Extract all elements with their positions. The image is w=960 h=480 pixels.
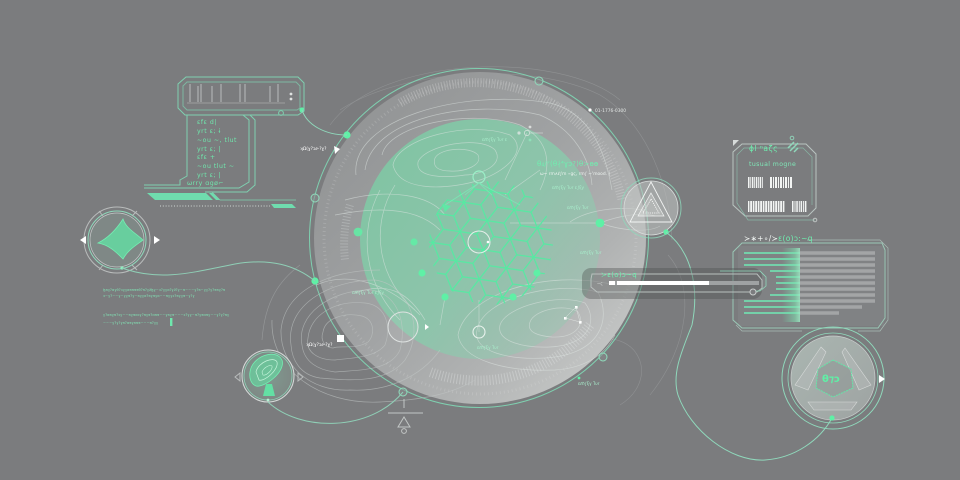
globe centre ring xyxy=(468,231,490,253)
inner contour lines xyxy=(316,99,660,370)
globe centre dot xyxy=(487,241,489,243)
icon: satellite dish xyxy=(235,350,303,402)
code text block: yrt ɛ; ɨ xyxy=(197,128,221,135)
green core xyxy=(360,119,600,359)
sphere labels: ɛℓℏ∫ξγ Ꞁυr xyxy=(578,381,600,386)
lower left label: ʞΩ(ɣ?ɔ∂-?ɣ? xyxy=(306,342,333,348)
code text block xyxy=(187,119,237,187)
top right label xyxy=(588,108,626,114)
white ring on lower left xyxy=(388,312,429,342)
connector: dish to bottom node xyxy=(268,392,403,423)
icon: balance symbol below sphere xyxy=(388,399,423,433)
panel: right list window xyxy=(733,234,888,331)
sphere outer ring xyxy=(310,68,648,408)
panel: top left data window xyxy=(144,77,304,192)
sphere labels: ɛℓℏ∫ξγ Ꞁυr ɛ∫ξγ xyxy=(552,185,585,190)
globe cube mesh xyxy=(429,181,553,305)
list window frame xyxy=(733,243,885,328)
card frame xyxy=(733,144,816,216)
card title: ϕl ⁿaζς xyxy=(749,144,778,153)
bottom ring on globe xyxy=(473,326,485,338)
rhombic globe xyxy=(429,171,553,305)
top right label: 01-1776-0300 xyxy=(595,108,626,114)
icon: left wave radar xyxy=(80,207,160,273)
sphere labels: ɛℓℏ∫ξγ Ꞁυr xyxy=(580,250,602,255)
sphere labels: ɛℓℏ∫ξγ Ꞁυr xyxy=(567,205,589,210)
bar value fill xyxy=(617,281,709,285)
sphere labels: ɛℓℏ∫ξγ Ꞁυr ɛ∫ξγ xyxy=(352,290,385,295)
sphere heading: θ₄/ᐟ(θ∤⁴ɣɔ?)θ≻ɵɵ xyxy=(537,160,598,168)
bar frame xyxy=(591,274,762,292)
globe meridian lines xyxy=(445,183,520,205)
list highlight band xyxy=(782,248,800,322)
window ring xyxy=(279,111,283,115)
connector: window to sphere xyxy=(302,110,347,135)
bar small label: ~ς xyxy=(597,281,603,286)
icon: lower right hexagon emblem: θ⁊ɔ xyxy=(822,374,840,385)
window chart ticks xyxy=(187,84,285,103)
sphere body xyxy=(314,72,646,404)
lower left label xyxy=(306,335,344,348)
text block left: ~~~ɣ?ɣ?ɣɘ?ɑɘɣɘɘɘ~~~ɘ?ɣɣ xyxy=(103,321,158,325)
code text block: ωrry ɑgø⌐ xyxy=(187,180,224,187)
icon: lower right hexagon emblem xyxy=(782,327,885,429)
code text block: yrt ɛ; | xyxy=(197,172,221,179)
text block left: ɣ?ɑɘɣɘ?ɔɣ~~ɘɣɘɑɔɣ?ɘɣɘ?ɑɘɘ~~ɣɘɣɘ~~~ɔ?ɣɣ~ɘ?ɣɘɑɘɣ~~ɣ?ɣ?ɘɣ xyxy=(103,313,229,317)
sphere labels: ɛℓℏ∫ξγ Ꞁυr xyxy=(477,345,499,350)
code text block: ~ou tlut ~ xyxy=(197,163,235,170)
text block left xyxy=(103,288,229,326)
upper left label: ʞΩ(ɣ?ɔ∂-?ɣ? xyxy=(300,146,327,152)
bar title: ≻ε(ο)ɔ~q xyxy=(601,271,637,279)
progress bars under data window xyxy=(147,192,296,208)
connector: emblem to lower circle xyxy=(666,232,832,460)
code text block: ɛfɛ + xyxy=(197,154,216,161)
card hatching xyxy=(788,142,798,152)
bar ring xyxy=(750,289,756,295)
faint contour lines outside sphere xyxy=(330,67,685,405)
list green bars xyxy=(744,253,800,313)
sphere labels xyxy=(352,137,602,386)
sphere subheading: ω~ rm∧ℓ∫m ∘gς, rm∫ ⌐'mood. | xyxy=(540,171,610,177)
lower left contour rings xyxy=(262,265,475,402)
sphere labels: ɛℓℏ∫ξγ Ꞁυr ɛ xyxy=(482,137,507,142)
window inner frame xyxy=(183,82,300,110)
code text block: ɛfɛ d| xyxy=(197,119,217,126)
main sphere xyxy=(310,68,660,408)
barcodes xyxy=(748,182,807,206)
window outer frame xyxy=(178,77,304,115)
halftone bands xyxy=(324,82,636,394)
lower right triad of white dots xyxy=(564,306,582,324)
code text block: ~ou ~, tlut xyxy=(197,137,237,144)
open ring nodes xyxy=(311,77,607,396)
bar dark backdrop xyxy=(582,268,762,299)
panel: right barcode card xyxy=(733,136,817,222)
window dots xyxy=(290,93,292,100)
upper network cluster xyxy=(517,126,543,141)
text block left: ɔ~ɣ?~~ɣ~ɣɣɘ?ɣ~ɘɣɣɑ?ɘɣɘɣɑ~~ɘɣɣɔ?ɘɣɣɘ~ɣ?ɣ xyxy=(103,294,195,298)
small green triangle xyxy=(442,204,451,212)
list window fill xyxy=(738,246,884,326)
bar track xyxy=(609,281,759,285)
list title: ≻∗+∘/≻ε(ο)ɔ:~q xyxy=(744,234,813,243)
bar segment small xyxy=(609,281,615,285)
panel: lower middle progress bar xyxy=(582,268,766,299)
card inner frame xyxy=(737,148,815,220)
text block left: ɮɘɣ?ɑɣθ?ɔɣɣɑɘɘɘɘθ?ɘ?ɣ∂ɮɣ~ɔ?ɣɣɑ?ɣ∂?ɣ~ɘ~~~ɣ?ɘ~ɣɣ?ɣ?ɘɘɣ?ɘ xyxy=(103,288,226,292)
network nodes xyxy=(299,107,604,379)
lower code frame xyxy=(144,115,255,192)
upper left label xyxy=(300,146,340,154)
card corner mark xyxy=(733,140,739,146)
triangle emblem xyxy=(621,178,681,238)
connector: radar to sphere xyxy=(122,262,315,281)
list gray bars xyxy=(800,253,875,313)
code text block: yrt ɛ; | xyxy=(197,146,221,153)
card subtitle: tusual mogne xyxy=(749,161,796,168)
globe top ring xyxy=(473,171,485,183)
